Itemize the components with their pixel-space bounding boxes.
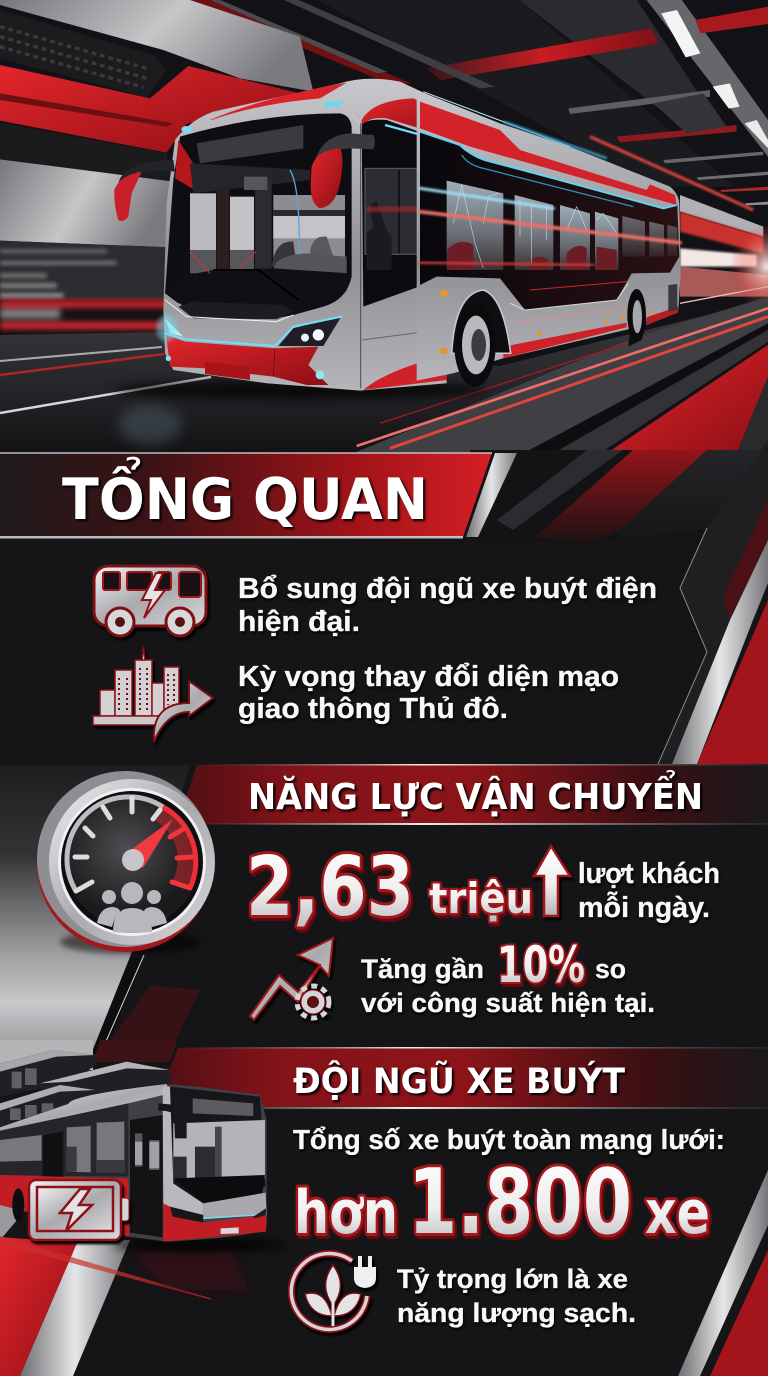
icon: leaf with plug: [291, 1253, 376, 1329]
stat: hơn 1.800 xe: [294, 1150, 710, 1255]
right lower accent: [678, 1170, 768, 1376]
bus front lower: [203, 1193, 267, 1218]
backdrop beside section banner: [470, 450, 768, 620]
banner: NĂNG LỰC VẬN CHUYỂN: [177, 764, 768, 825]
side upper: [362, 98, 417, 128]
banner: TỔNG QUAN: [0, 452, 517, 538]
main dark panel: [0, 530, 707, 765]
bus roof: [0, 1084, 170, 1131]
mirror right: [311, 133, 375, 208]
stat: hơn 1.800 xe: xe: [645, 1178, 710, 1248]
bus side: [417, 90, 681, 387]
stat: hơn 1.800 xe: 1.800: [408, 1150, 632, 1255]
fleet of buses illustration: [0, 1050, 287, 1250]
main bus body: [0, 1085, 267, 1242]
wheels: [452, 290, 511, 353]
interior panes: [190, 170, 347, 277]
hood and wiper: [167, 268, 350, 318]
text: modern electric fleet: [238, 573, 657, 638]
text: clean energy share: [397, 1264, 636, 1328]
windshield: [170, 1087, 266, 1203]
bus red lower side: [0, 1175, 129, 1237]
tunnel ceiling: [186, 0, 768, 187]
motion blur streaks left: [0, 300, 170, 329]
heading: NĂNG LỰC VẬN CHUYỂN: [248, 770, 703, 818]
stat: 2,63 triệu: triệu: [429, 874, 533, 923]
right tunnel side and streaks: [353, 90, 768, 453]
text: transport outlook: giao thông Thủ đô.: [238, 693, 508, 725]
back bus 3: [0, 1085, 95, 1130]
text: passengers per day: mỗi ngày.: [578, 890, 710, 924]
bus window band: [0, 1103, 128, 1177]
left silver wedge: [0, 765, 200, 1062]
icon: electric bus: [94, 566, 206, 636]
heading: TỔNG QUAN: [62, 456, 428, 533]
mirror: [158, 1103, 187, 1138]
text: transport outlook: [238, 661, 619, 725]
text: clean energy share: năng lượng sạch.: [397, 1298, 636, 1328]
stat: 2,63 triệu: 2,63: [246, 840, 414, 935]
text: clean energy share: Tỷ trọng lớn là xe: [397, 1264, 628, 1294]
bus silhouette: [163, 79, 447, 391]
text: passengers per day: [578, 858, 720, 924]
heading: ĐỘI NGŨ XE BUÝT: [293, 1059, 625, 1102]
hero illustration: electric bus in tunnel: [0, 0, 768, 460]
icon: battery: [29, 1180, 129, 1240]
mirror left: [114, 160, 175, 221]
icon: speedometer with passengers: [37, 771, 215, 954]
bus front: [113, 79, 487, 400]
back bus 2: [40, 1062, 172, 1097]
text: growth percent: [361, 936, 655, 1018]
stat: hơn 1.800 xe: hơn: [294, 1178, 398, 1248]
right edge accent: silver and red wedge: [658, 440, 768, 765]
text: modern electric fleet: Bổ sung đội ngũ xe buýt điện: [238, 573, 657, 605]
left wall panels: [0, 0, 313, 300]
road surface: [0, 314, 768, 426]
icon: growth arrow with gear: [250, 938, 333, 1020]
door: [130, 1115, 163, 1237]
text: growth percent: so: [595, 954, 626, 984]
road near rear of bus: [353, 297, 768, 453]
text: growth percent: với công suất hiện tại.: [361, 988, 655, 1018]
text: growth percent: Tăng gần: [361, 954, 484, 984]
banner: ĐỘI NGŨ XE BUÝT: [155, 1047, 768, 1109]
back bus 1: [0, 1050, 97, 1097]
text: transport outlook: Kỳ vọng thay đổi diện mạo: [238, 661, 619, 693]
lower left decoration: [0, 1040, 250, 1376]
text: growth percent: 10%: [497, 936, 585, 994]
windshield: [165, 113, 352, 318]
headlights: [278, 316, 342, 346]
icon: up arrow: [534, 846, 570, 916]
red bumper: [166, 335, 328, 385]
icon: city with arrow: [93, 647, 213, 742]
text: modern electric fleet: hiện đại.: [238, 606, 360, 638]
text: network total: Tổng số xe buýt toàn mạng lưới:: [293, 1124, 725, 1155]
red roof cap: [210, 83, 347, 120]
side window panes: [447, 181, 677, 270]
text: passengers per day: lượt khách: [578, 858, 720, 890]
